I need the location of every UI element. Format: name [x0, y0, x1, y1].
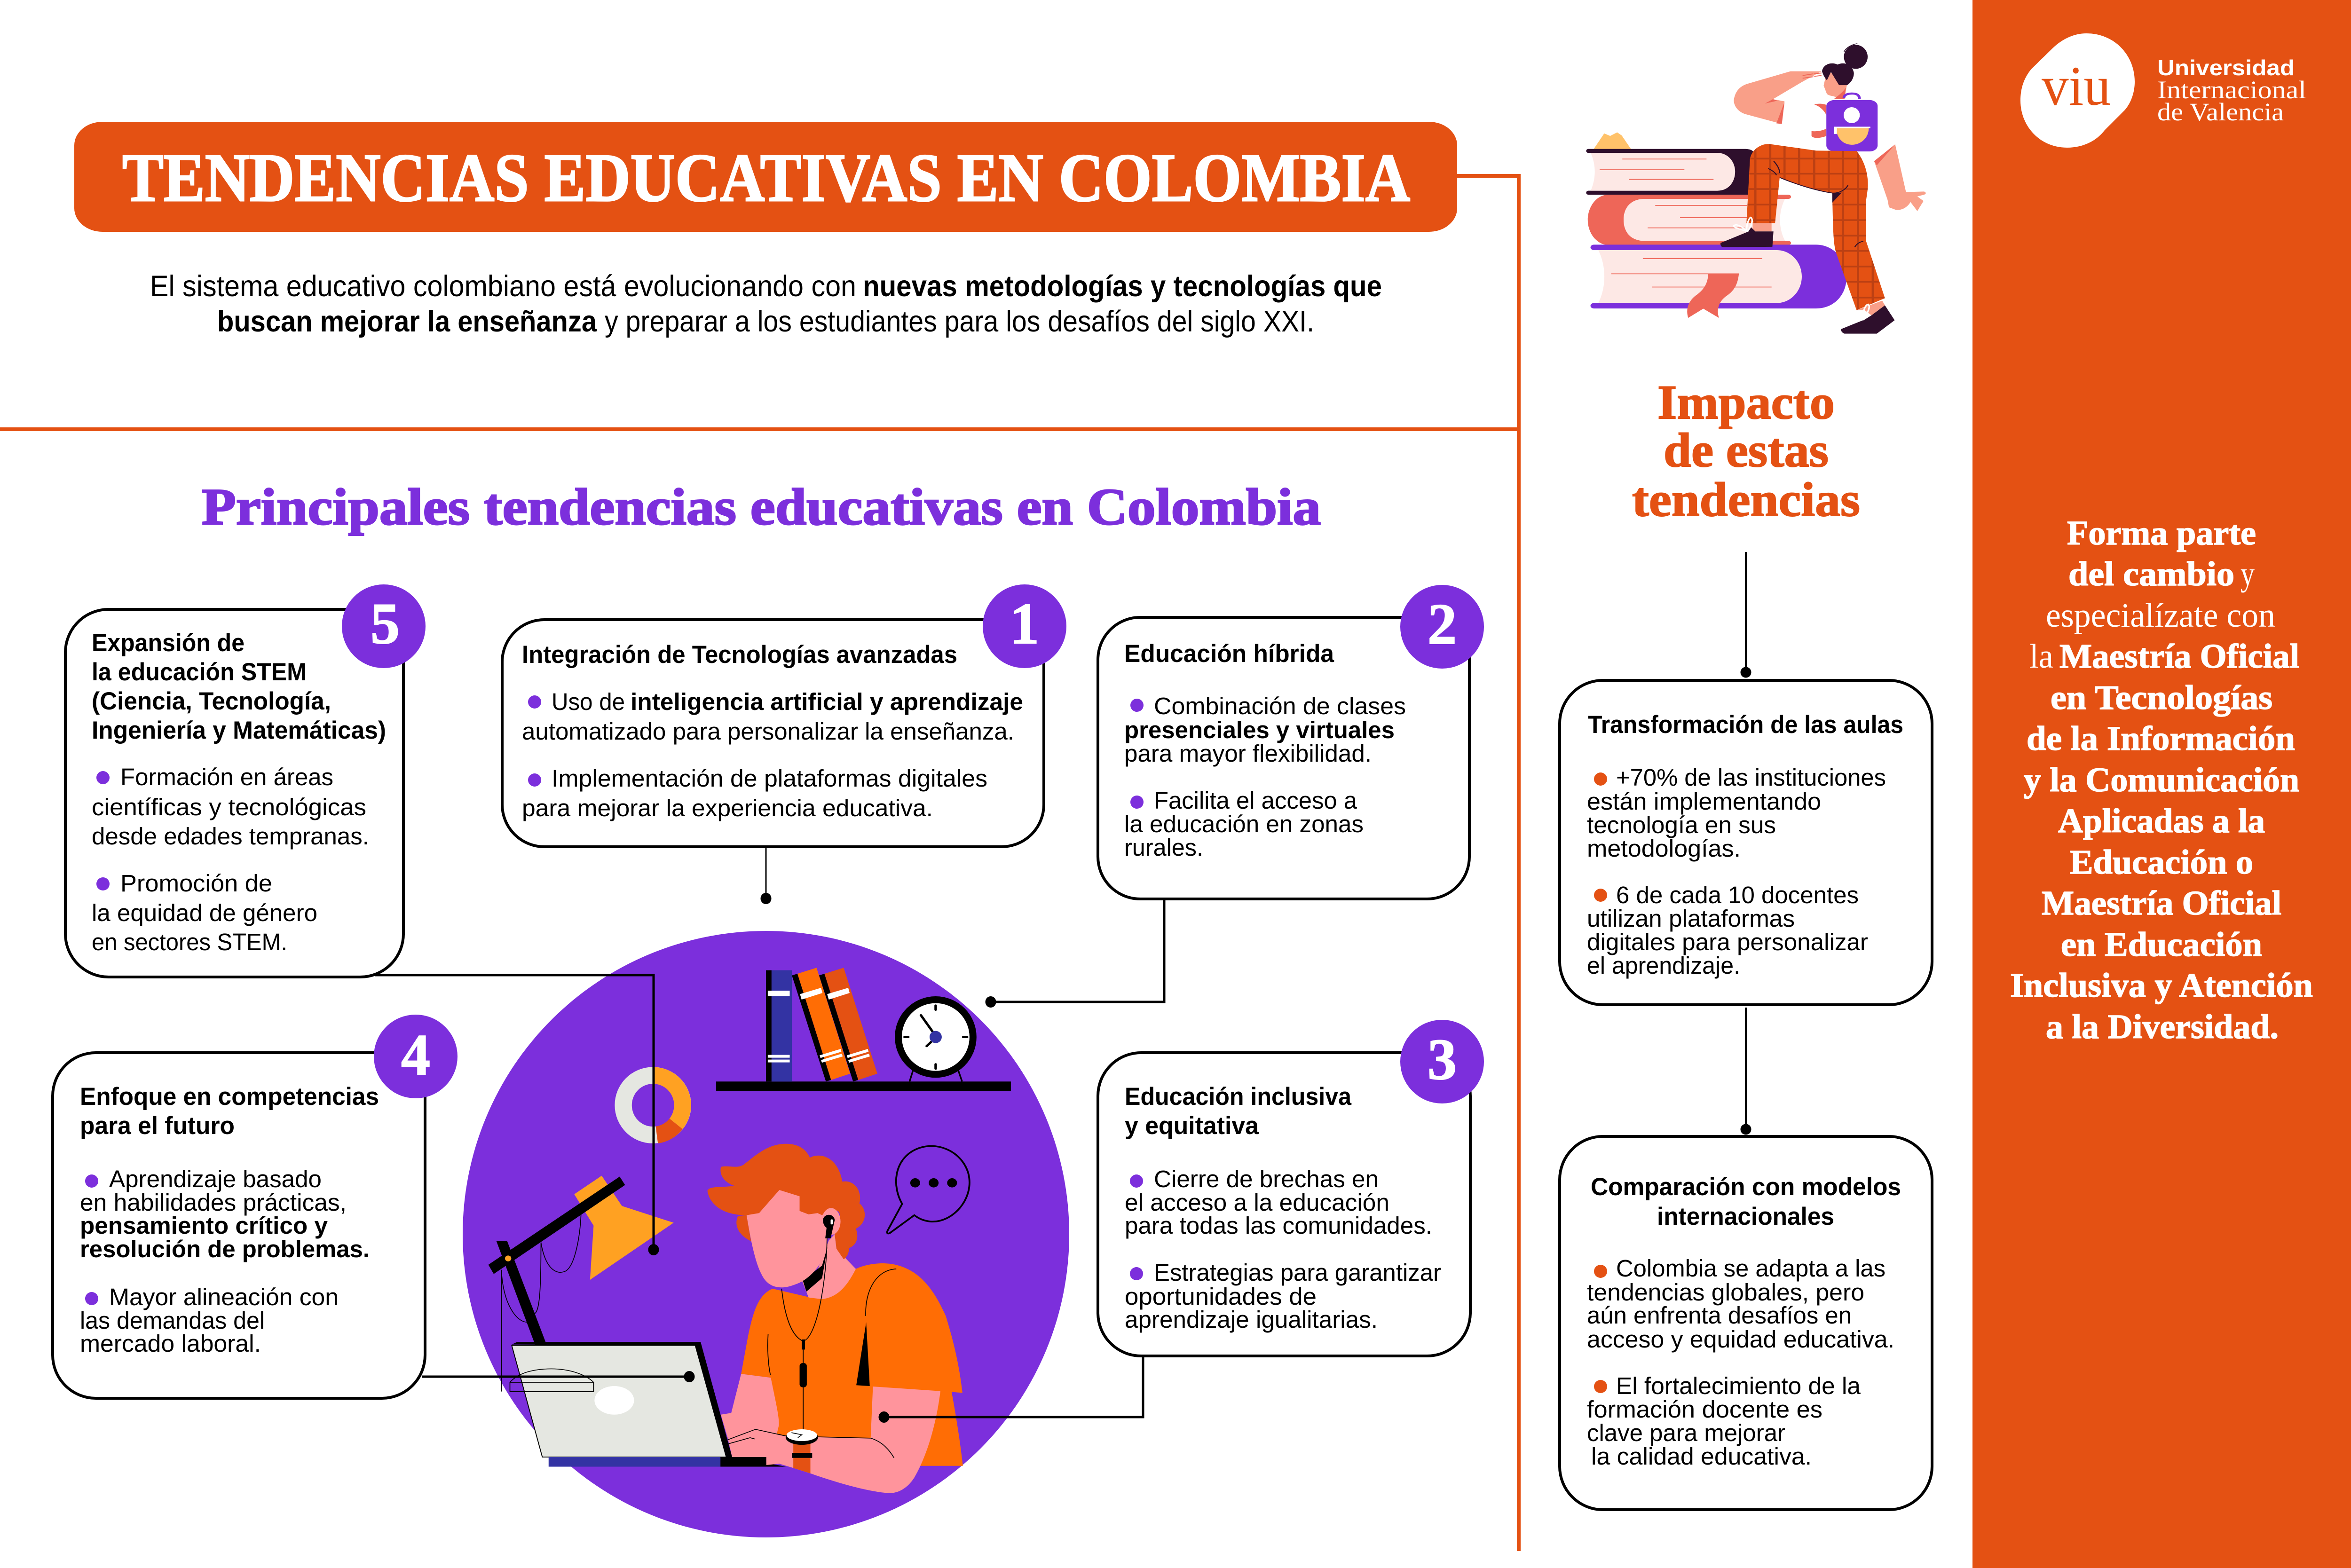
- badge 1: [983, 584, 1066, 668]
- badge 1: 1: [1010, 591, 1039, 656]
- shelf with books and clock: [716, 968, 1011, 1091]
- body: tecnología en sus: [1587, 812, 1776, 838]
- panel: classroom transformation: [1560, 680, 1932, 1005]
- body: 6 de cada 10 docentes: [1616, 882, 1859, 908]
- body: están implementando: [1587, 788, 1821, 815]
- heading 4: para el futuro: [80, 1112, 235, 1140]
- sidebar call to action text: [2010, 514, 2313, 1046]
- badge 2: 2: [1428, 592, 1457, 656]
- heading: Comparación con modelos: [1591, 1173, 1901, 1201]
- body 5: científicas y tecnológicas: [92, 794, 366, 820]
- body 1: automatizado para personalizar la enseñanza.: [522, 718, 1014, 745]
- speech bubble: [887, 1146, 970, 1234]
- body 3: Estrategias para garantizar: [1154, 1259, 1441, 1286]
- body 1: Implementación de plataformas digitales: [552, 765, 987, 792]
- body 2: [1124, 693, 1406, 861]
- connector: impact heading to classrooms card: [1741, 552, 1751, 678]
- body: [1587, 764, 1886, 979]
- student: [707, 1144, 963, 1493]
- body: clave para mejorar: [1587, 1419, 1785, 1446]
- logo: VIU: viu: [2042, 55, 2111, 117]
- intro text: nuevas metodologías y tecnologías que: [863, 270, 1382, 303]
- badge 3: 3: [1428, 1027, 1457, 1092]
- sidebar call to action text: especialízate con: [2046, 596, 2275, 634]
- intro text: [150, 270, 1382, 338]
- connector: card 5 to lamp: [375, 975, 659, 1255]
- sidebar call to action text: en Educación: [2061, 925, 2262, 963]
- body 3: el acceso a la educación: [1125, 1189, 1389, 1216]
- panel: comparison with international models: [1560, 1136, 1932, 1510]
- body: +70% de las instituciones: [1616, 764, 1886, 791]
- sidebar call to action text: a la Diversidad.: [2046, 1008, 2279, 1046]
- heading 5: [92, 629, 386, 744]
- body 2: la educación en zonas: [1124, 811, 1364, 837]
- body 5: la equidad de género: [92, 899, 317, 926]
- body 3: para todas las comunidades.: [1125, 1212, 1432, 1239]
- heading: Transformación de las aulas: [1588, 711, 1903, 739]
- illustration: student at laptop in purple circle: [463, 931, 1069, 1537]
- title banner: TENDENCIAS EDUCATIVAS EN COLOMBIA: [122, 140, 1410, 216]
- heading 4: [80, 1083, 379, 1140]
- body: formación docente es: [1587, 1396, 1822, 1423]
- heading 1: Integración de Tecnologías avanzadas: [522, 641, 957, 669]
- desk lamp: [489, 1176, 674, 1392]
- sidebar call to action text: Forma parte: [2067, 514, 2256, 552]
- body: acceso y equidad educativa.: [1587, 1326, 1894, 1353]
- body 5: [92, 764, 369, 955]
- horizontal section divider: [0, 427, 1517, 431]
- sidebar call to action text: de la Información: [2027, 719, 2295, 757]
- logo: VIU: Universidad: [2157, 55, 2295, 80]
- body 1: inteligencia artificial y aprendizaje: [631, 688, 1023, 715]
- connector: classrooms card to comparison card: [1741, 1008, 1751, 1135]
- body 1: Uso de: [552, 688, 625, 715]
- body: [1587, 1255, 1894, 1470]
- sidebar call to action text: y la Comunicación: [2024, 761, 2299, 799]
- illustration: woman climbing books: [1586, 44, 1926, 334]
- sidebar call to action text: Aplicadas a la: [2058, 802, 2265, 840]
- heading 5: la educación STEM: [92, 658, 307, 686]
- impact heading: Impacto: [1657, 376, 1835, 429]
- body 3: oportunidades de: [1125, 1283, 1317, 1310]
- section heading: Principales tendencias educativas en Colombia: [202, 478, 1321, 536]
- badge 2: [1400, 585, 1484, 669]
- logo: VIU: [2020, 33, 2306, 148]
- panel: trend 4 competencies: [53, 1015, 458, 1398]
- sidebar call to action text: del cambio: [2068, 555, 2234, 593]
- sidebar call to action text: Educación o: [2070, 843, 2253, 881]
- body 4: Aprendizaje basado: [109, 1166, 322, 1192]
- body 4: [80, 1166, 370, 1357]
- heading 5: Expansión de: [92, 629, 245, 657]
- heading 3: [1125, 1083, 1351, 1140]
- connector: card 4 to laptop: [422, 1371, 695, 1382]
- body: aún enfrenta desafíos en: [1587, 1302, 1852, 1329]
- orange connector from title to impact column: [1457, 176, 1519, 1551]
- logo: VIU: de Valencia: [2157, 98, 2284, 126]
- intro text: y preparar a los estudiantes para los desafíos del siglo XXI.: [605, 305, 1314, 338]
- body 2: para mayor flexibilidad.: [1124, 740, 1372, 767]
- body 4: las demandas del: [80, 1307, 265, 1334]
- body 4: mercado laboral.: [80, 1330, 261, 1357]
- body 3: [1125, 1166, 1441, 1333]
- panel: right orange sidebar: [1972, 0, 2351, 1568]
- badge 4: [374, 1015, 458, 1098]
- heading: internacionales: [1657, 1203, 1834, 1230]
- body: metodologías.: [1587, 835, 1741, 862]
- body 4: en habilidades prácticas,: [80, 1189, 347, 1216]
- panel: trend 5 STEM: [65, 584, 426, 977]
- sidebar call to action text: Maestría Oficial: [2059, 637, 2299, 675]
- donut chart: [615, 1067, 691, 1143]
- logo: VIU: Internacional: [2157, 76, 2306, 104]
- heading 3: y equitativa: [1125, 1112, 1259, 1140]
- sidebar call to action text: la: [2029, 637, 2053, 675]
- impact heading: [1632, 376, 1860, 527]
- heading 4: Enfoque en competencias: [80, 1083, 379, 1111]
- badge 4: 4: [401, 1023, 430, 1087]
- woman figure: [1720, 44, 1926, 334]
- body 1: para mejorar la experiencia educativa.: [522, 795, 933, 821]
- body 2: Facilita el acceso a: [1154, 787, 1357, 814]
- body 4: pensamiento crítico y: [80, 1212, 328, 1239]
- title banner: [74, 122, 1457, 232]
- heading 2: Educación híbrida: [1124, 640, 1334, 668]
- body 1: [522, 688, 1023, 821]
- panel: trend 1 technologies: [502, 584, 1066, 847]
- impact heading: de estas: [1664, 424, 1829, 477]
- body: Colombia se adapta a las: [1616, 1255, 1886, 1282]
- heading 5: Ingeniería y Matemáticas): [92, 717, 386, 744]
- book stack: [1586, 133, 1846, 318]
- body 2: Combinación de clases: [1154, 693, 1406, 719]
- panel: trend 2 hybrid education: [1098, 585, 1484, 899]
- body 5: en sectores STEM.: [92, 929, 287, 955]
- body: utilizan plataformas: [1587, 905, 1795, 932]
- panel: trend 3 inclusive education: [1098, 1020, 1484, 1356]
- body 5: desde edades tempranas.: [92, 823, 369, 850]
- person, lamp, laptop and chart: [489, 1067, 970, 1493]
- impact heading: tendencias: [1632, 473, 1860, 527]
- heading 3: Educación inclusiva: [1125, 1083, 1351, 1111]
- body: el aprendizaje.: [1587, 952, 1740, 979]
- intro text: El sistema educativo colombiano está evolucionando con: [150, 270, 856, 303]
- connector: card 2 to shelf: [986, 899, 1164, 1008]
- laptop: [510, 1342, 786, 1467]
- body: digitales para personalizar: [1587, 929, 1868, 955]
- badge 5: [342, 584, 426, 668]
- heading 5: (Ciencia, Tecnología,: [92, 687, 331, 715]
- body 3: aprendizaje igualitarias.: [1125, 1306, 1378, 1333]
- intro text: buscan mejorar la enseñanza: [217, 305, 597, 338]
- body 3: Cierre de brechas en: [1154, 1166, 1379, 1192]
- sidebar call to action text: Inclusiva y Atención: [2010, 966, 2313, 1004]
- badge 5: 5: [371, 591, 400, 656]
- body 5: Promoción de: [120, 870, 272, 897]
- sidebar call to action text: en Tecnologías: [2051, 678, 2272, 717]
- body 4: resolución de problemas.: [80, 1236, 370, 1262]
- connector: card 3 to student arm: [878, 1356, 1143, 1423]
- body: la calidad educativa.: [1591, 1443, 1812, 1470]
- body: El fortalecimiento de la: [1616, 1372, 1861, 1399]
- body 5: Formación en áreas: [120, 764, 333, 790]
- sidebar call to action text: Maestría Oficial: [2042, 884, 2281, 922]
- sidebar call to action text: y: [2241, 555, 2255, 593]
- body 2: presenciales y virtuales: [1124, 717, 1395, 743]
- body: tendencias globales, pero: [1587, 1279, 1864, 1306]
- body 2: rurales.: [1124, 834, 1203, 861]
- heading: [1591, 1173, 1901, 1230]
- badge 3: [1400, 1020, 1484, 1103]
- body 4: Mayor alineación con: [109, 1284, 339, 1310]
- connector: card 1 to circle: [761, 848, 771, 904]
